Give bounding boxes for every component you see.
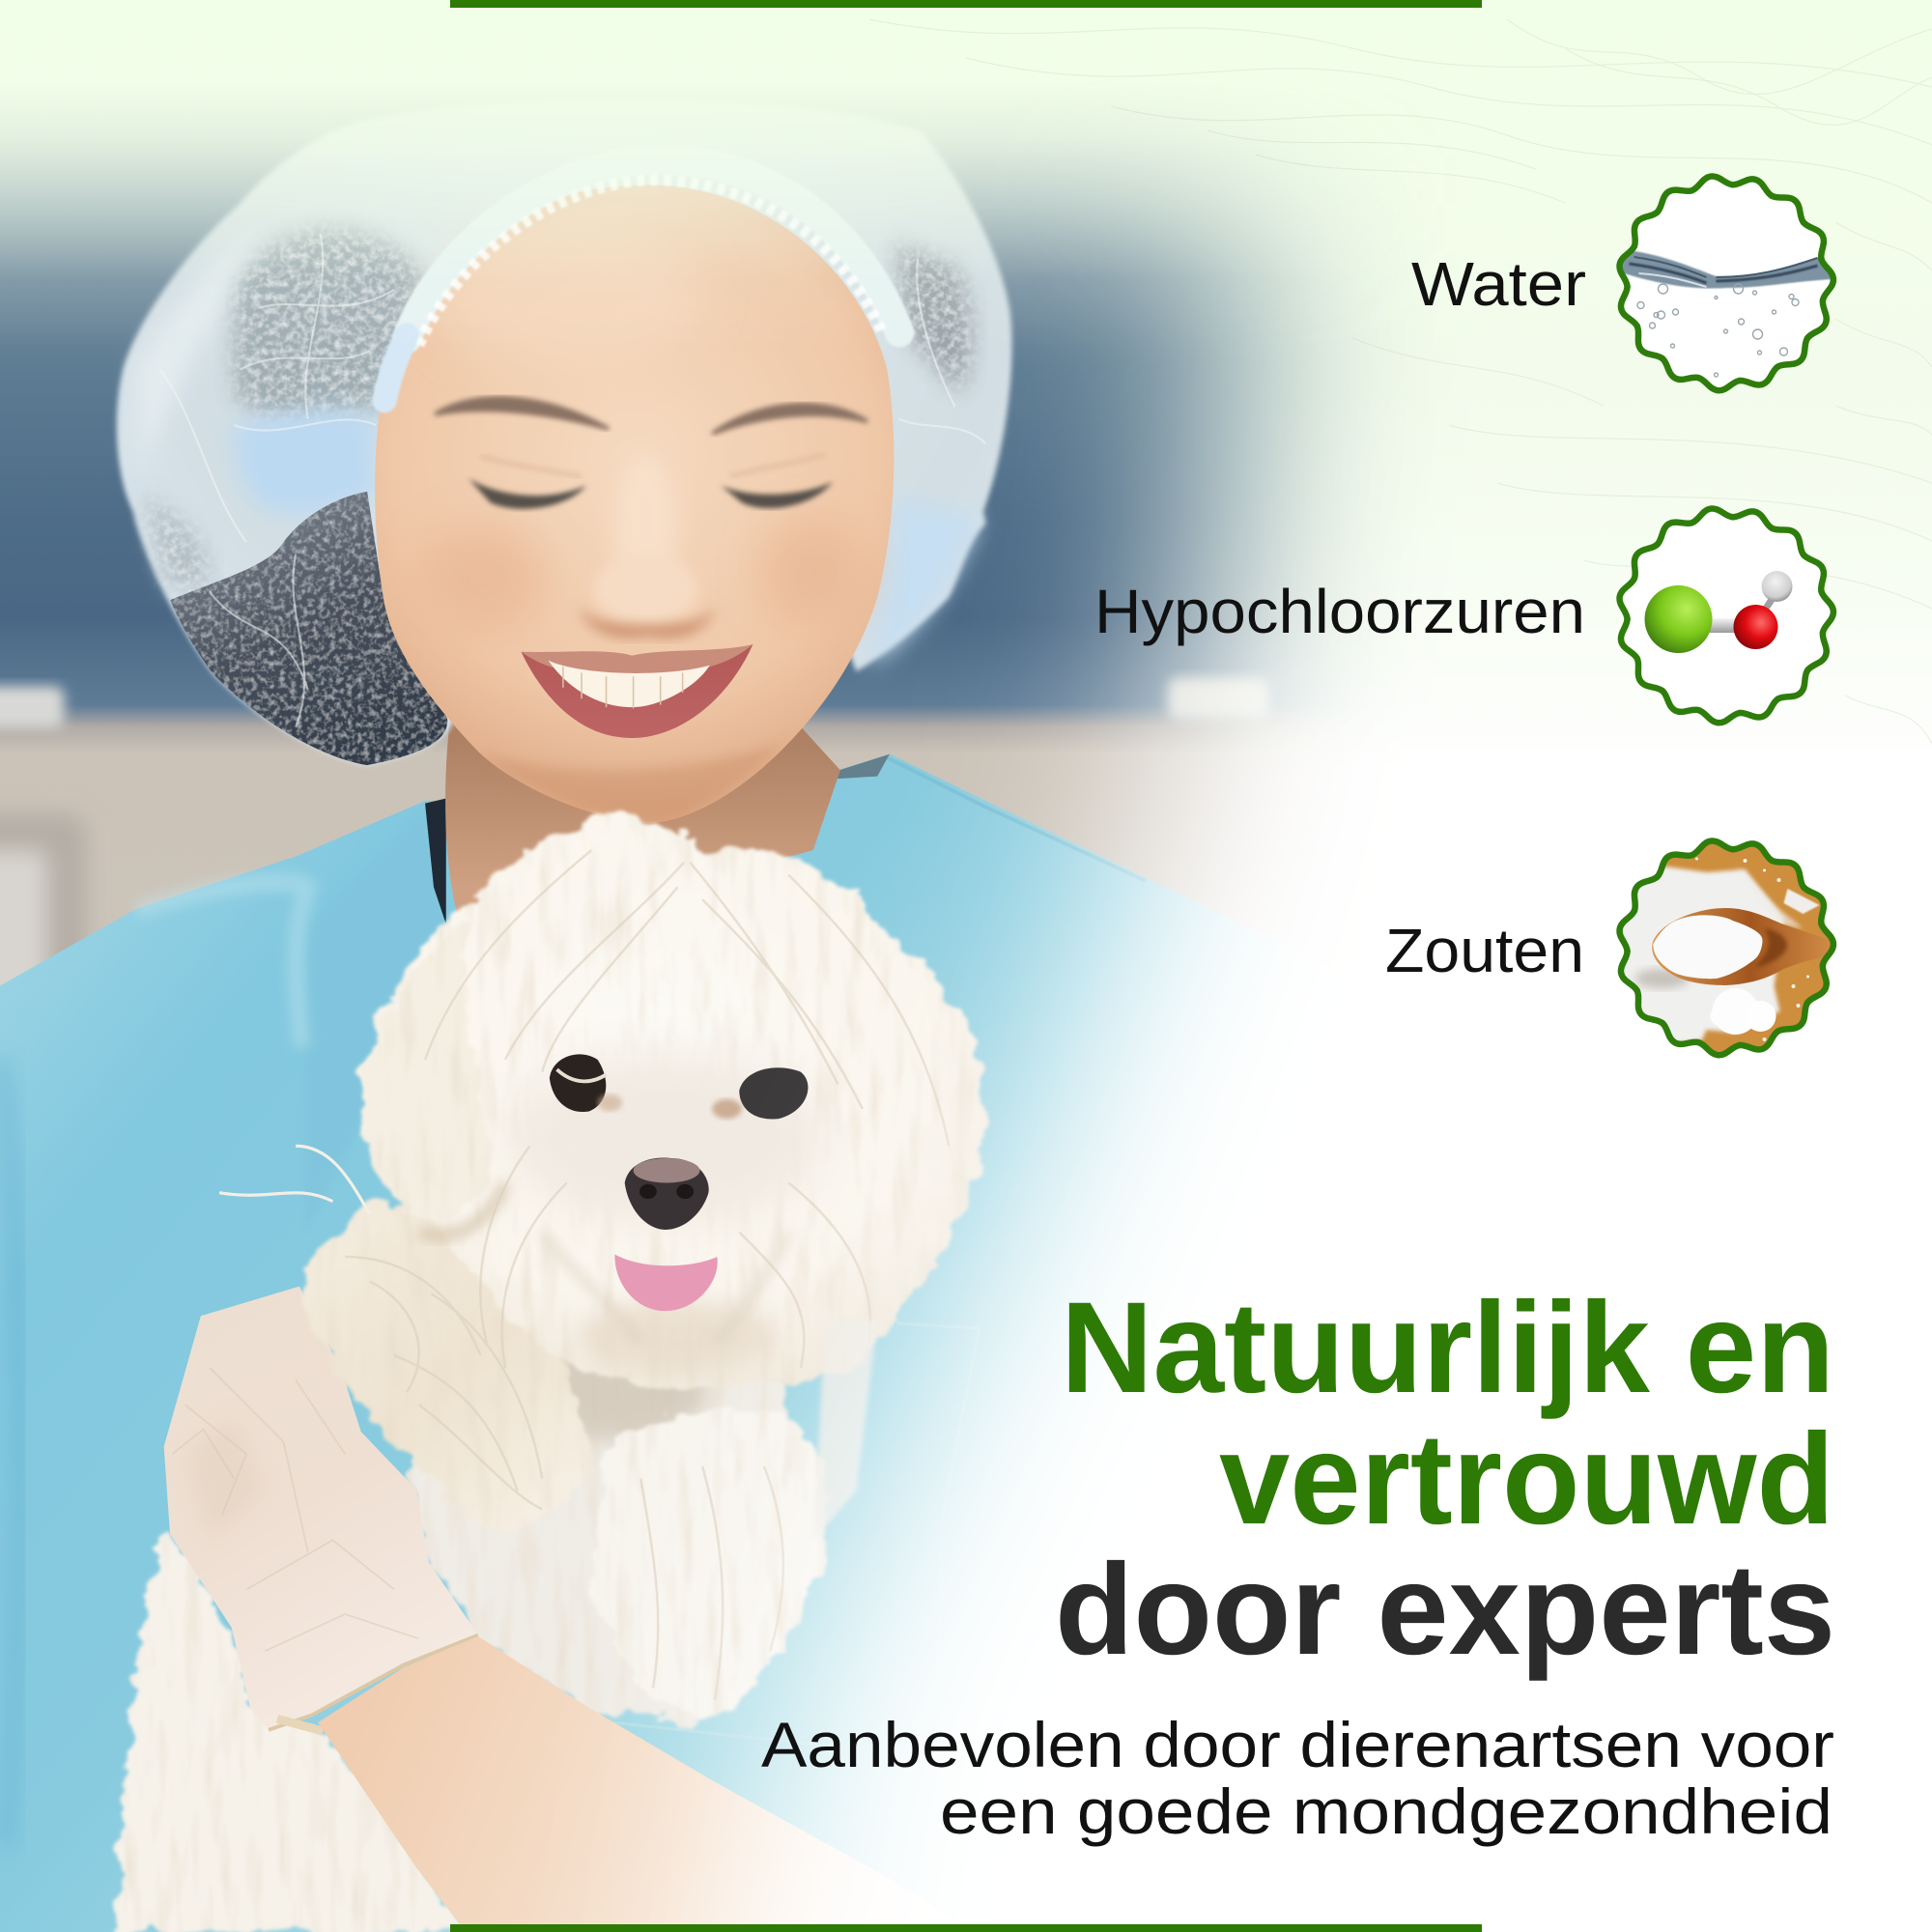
hair net back (117, 99, 1012, 765)
headline: Natuurlijk en (1061, 1276, 1834, 1420)
headline (1055, 1276, 1835, 1682)
label: Hypochloorzuren: Hypochloorzuren (1094, 577, 1585, 646)
gloved hand (164, 1287, 478, 1731)
nose (579, 456, 717, 638)
blurred clinic background (0, 111, 1383, 985)
scrubs (0, 753, 1213, 1932)
headline: door experts (1055, 1538, 1835, 1682)
subheading: Aanbevolen door dierenartsen voor (761, 1709, 1834, 1780)
icon: water badge (1616, 174, 1834, 392)
label: Water: Water (1411, 249, 1586, 319)
dog body shadow (524, 1343, 708, 1441)
eyebrows (435, 398, 609, 429)
dog lower body (115, 1534, 469, 1932)
face (375, 185, 894, 823)
subheading: een goede mondgezondheid (940, 1776, 1833, 1847)
fur strands (345, 850, 949, 1700)
bottom bar (450, 1924, 1482, 1932)
wave line pattern (869, 19, 1932, 744)
hair net band (384, 160, 899, 401)
name badge (813, 1319, 877, 1540)
dog head (219, 813, 984, 1700)
photo: vet with dog (0, 111, 1383, 1932)
dog right paw (591, 1410, 826, 1719)
icon: salt badge (1605, 832, 1841, 1068)
closed eyes (469, 453, 833, 509)
icon: molecule badge (1616, 506, 1834, 724)
smile (522, 644, 753, 738)
ingredient: hypochlorous (1094, 506, 1834, 724)
ingredient: water (1411, 174, 1834, 392)
label: Zouten: Zouten (1385, 916, 1584, 985)
subheading (761, 1709, 1834, 1847)
top bar (450, 0, 1482, 8)
collar shadow (425, 799, 446, 924)
dog eyes (550, 1054, 808, 1119)
arm (318, 1636, 974, 1932)
dog nose (625, 1158, 709, 1230)
neck (445, 721, 840, 913)
dog chest (407, 1343, 788, 1725)
dog tongue (614, 1254, 718, 1311)
headline: vertrouwd (1219, 1407, 1834, 1551)
ingredient: salts (1385, 832, 1841, 1068)
dog left curls (301, 1204, 589, 1529)
